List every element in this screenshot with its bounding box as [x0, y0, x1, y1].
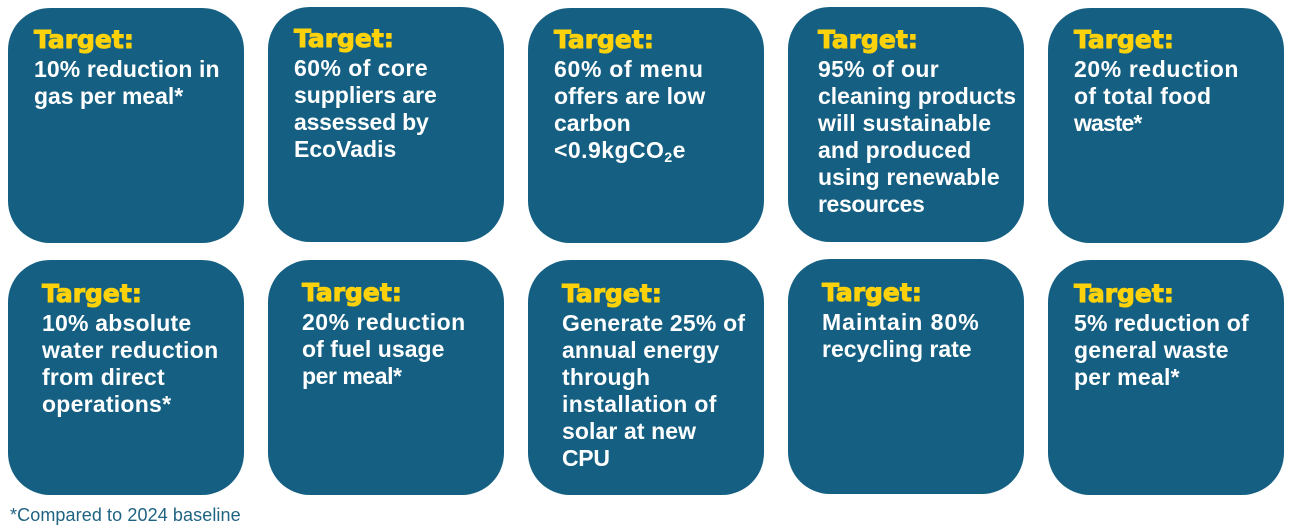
text: water target: 10% absolute [42, 310, 191, 336]
panel: food waste target [1048, 8, 1284, 243]
text: general waste target [1074, 310, 1249, 390]
text: solar energy target: solar at new [562, 418, 696, 444]
panel: low carbon menu target [528, 8, 764, 243]
heading: target: Target: [554, 25, 654, 54]
heading: target: Target: [34, 25, 134, 54]
text: supplier target: suppliers are [294, 82, 437, 108]
text: cleaning products target: cleaning products [818, 83, 1016, 109]
text: gas target: gas per meal* [34, 83, 183, 109]
text: water target: water reduction [42, 337, 219, 363]
text: solar energy target: Generate 25% of [562, 310, 745, 336]
heading: target: Target: [294, 24, 394, 53]
heading: target: Target: [42, 279, 142, 308]
text: supplier target: assessed by [294, 109, 429, 135]
text: low carbon menu target: carbon [554, 110, 631, 136]
text: low carbon menu target: <0.9kgCO2e [554, 137, 686, 165]
heading: target: Target: [818, 25, 918, 54]
panel: recycling target [788, 259, 1024, 494]
panel: cleaning products target [788, 7, 1024, 242]
text: recycling target [822, 309, 980, 362]
text: fuel target: 20% reduction [302, 309, 466, 335]
text: food waste target: waste* [1074, 110, 1141, 136]
text: fuel target: of fuel usage [302, 336, 445, 362]
text: recycling target: recycling rate [822, 336, 972, 362]
text: low carbon menu target: 60% of menu [554, 56, 704, 82]
text: low carbon menu target [554, 56, 706, 165]
heading: target: Target: [822, 278, 922, 307]
text: food waste target [1074, 56, 1239, 136]
text: gas target [34, 56, 220, 109]
panel: general waste target [1048, 260, 1284, 495]
text: solar energy target: CPU [562, 445, 610, 471]
text: recycling target: Maintain 80% [822, 309, 980, 335]
text: fuel target: per meal* [302, 363, 402, 389]
text: supplier target [294, 55, 437, 162]
text: cleaning products target: 95% of our [818, 56, 939, 82]
heading: target: Target: [1074, 279, 1174, 308]
text: cleaning products target: using renewable [818, 164, 1000, 190]
text: solar energy target: installation of [562, 391, 717, 417]
heading: target: Target: [562, 279, 662, 308]
text: general waste target: general waste [1074, 337, 1229, 363]
panel: water target [8, 260, 244, 495]
text: cleaning products target: will sustainable [818, 110, 991, 136]
panel: solar energy target [528, 260, 764, 495]
text: cleaning products target: and produced [818, 137, 971, 163]
text: food waste target: of total food [1074, 83, 1211, 109]
footnote: *Compared to 2024 baseline [10, 505, 241, 525]
panel: fuel target [268, 260, 504, 495]
panel: gas target [8, 8, 244, 243]
text: solar energy target: through [562, 364, 650, 390]
text: solar energy target [562, 310, 746, 471]
text: low carbon menu target: offers are low [554, 83, 705, 109]
text: supplier target: 60% of core [294, 55, 428, 81]
text: general waste target: 5% reduction of [1074, 310, 1249, 336]
text: food waste target: 20% reduction [1074, 56, 1239, 82]
text: cleaning products target: resources [818, 191, 924, 217]
text: water target: from direct [42, 364, 165, 390]
heading: target: Target: [302, 278, 402, 307]
heading: target: Target: [1074, 25, 1174, 54]
text: supplier target: EcoVadis [294, 136, 396, 162]
text: fuel target [302, 309, 466, 389]
text: gas target: 10% reduction in [34, 56, 220, 82]
text: general waste target: per meal* [1074, 364, 1180, 390]
text: water target [42, 310, 219, 417]
text: solar energy target: annual energy [562, 337, 719, 363]
text: cleaning products target [818, 56, 1016, 217]
text: water target: operations* [42, 391, 171, 417]
panel: supplier target [268, 7, 504, 242]
